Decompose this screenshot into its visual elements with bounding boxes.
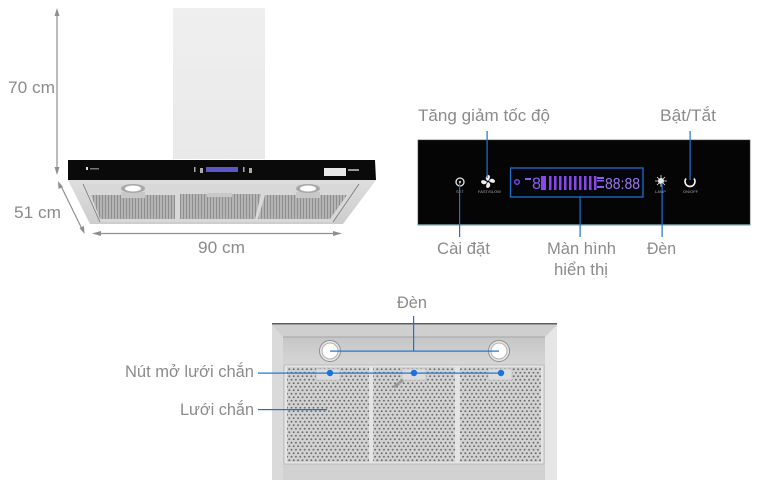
recess left edge xyxy=(83,184,100,222)
level bars xyxy=(541,176,596,190)
callout: mesh filter: Lưới chắn xyxy=(180,400,254,419)
middle mesh filter xyxy=(373,367,455,462)
recess right edge xyxy=(333,184,359,222)
icon: power xyxy=(683,178,699,194)
display outline xyxy=(510,168,643,197)
left mesh filter xyxy=(287,367,369,462)
middle filter xyxy=(180,194,261,219)
right lamp xyxy=(296,184,320,198)
callout: speed xyxy=(418,106,550,178)
left filter xyxy=(91,195,175,219)
control band xyxy=(68,160,376,180)
filter frame xyxy=(284,365,544,464)
icon: fan xyxy=(478,175,501,194)
band buttons xyxy=(194,167,252,173)
small bars xyxy=(525,178,531,180)
icon: lamp: LAMP xyxy=(655,189,666,194)
icon: set: SET xyxy=(456,189,464,194)
top bevel xyxy=(272,325,557,337)
outer frame xyxy=(272,323,557,480)
callout: display: Màn hình xyxy=(547,239,616,258)
digit: 8 xyxy=(532,174,541,193)
callout: settings: Cài đặt xyxy=(437,239,490,258)
hood body xyxy=(68,180,376,224)
right mesh filter xyxy=(460,367,541,462)
filter tabs xyxy=(316,369,512,380)
label: 51 cm: 51 cm xyxy=(14,203,61,222)
callout: lamp: Đèn xyxy=(647,239,676,258)
label: 70 cm: 70 cm xyxy=(8,78,55,97)
icon: lamp xyxy=(655,175,667,194)
clock digits: 88:88 xyxy=(605,176,640,193)
hood underside photo xyxy=(272,323,557,480)
bevel shadow xyxy=(283,336,545,338)
callout: underside lamps: Đèn xyxy=(397,293,427,312)
callout: display: hiển thị xyxy=(554,260,608,279)
arrow: depth 51 cm xyxy=(58,181,84,234)
top edge xyxy=(272,323,557,324)
recess xyxy=(83,184,359,222)
callout: filter release buttons xyxy=(125,362,504,381)
side marks xyxy=(597,177,604,188)
center latch xyxy=(394,380,403,387)
callout: filter release buttons: Nút mở lưới chắn xyxy=(125,362,254,381)
bulb glyph xyxy=(515,180,519,184)
brand mark xyxy=(86,167,99,170)
callout: display xyxy=(547,197,616,279)
panel background xyxy=(418,140,750,225)
chimney xyxy=(173,8,265,159)
band display xyxy=(206,167,238,172)
arrow: height 70 cm xyxy=(54,8,60,175)
icon: fan: FAST/SLOW xyxy=(478,189,501,194)
icon: power: ON/OFF xyxy=(683,189,699,194)
panel: control panel xyxy=(418,140,750,225)
hood product photo: front view xyxy=(68,8,376,224)
left side strip xyxy=(272,325,283,480)
callout: power xyxy=(660,106,716,180)
callout: power: Bật/Tắt xyxy=(660,106,716,125)
right filter xyxy=(258,195,347,219)
callout: lamp xyxy=(647,183,676,258)
right side strip xyxy=(545,325,557,480)
energy label xyxy=(324,168,359,176)
icon: set xyxy=(456,178,464,194)
lamp housing strip xyxy=(283,337,545,365)
callout: settings xyxy=(437,183,490,258)
lower strip xyxy=(283,464,545,480)
right lamp xyxy=(488,340,510,362)
display readout xyxy=(510,168,643,197)
arrow: width 90 cm xyxy=(92,231,342,236)
callout: speed: Tăng giảm tốc độ xyxy=(418,106,550,125)
label: 90 cm: 90 cm xyxy=(198,238,245,257)
left lamp xyxy=(320,340,340,362)
center tab xyxy=(207,193,232,197)
left lamp xyxy=(121,184,145,198)
bottom highlight xyxy=(418,224,750,226)
